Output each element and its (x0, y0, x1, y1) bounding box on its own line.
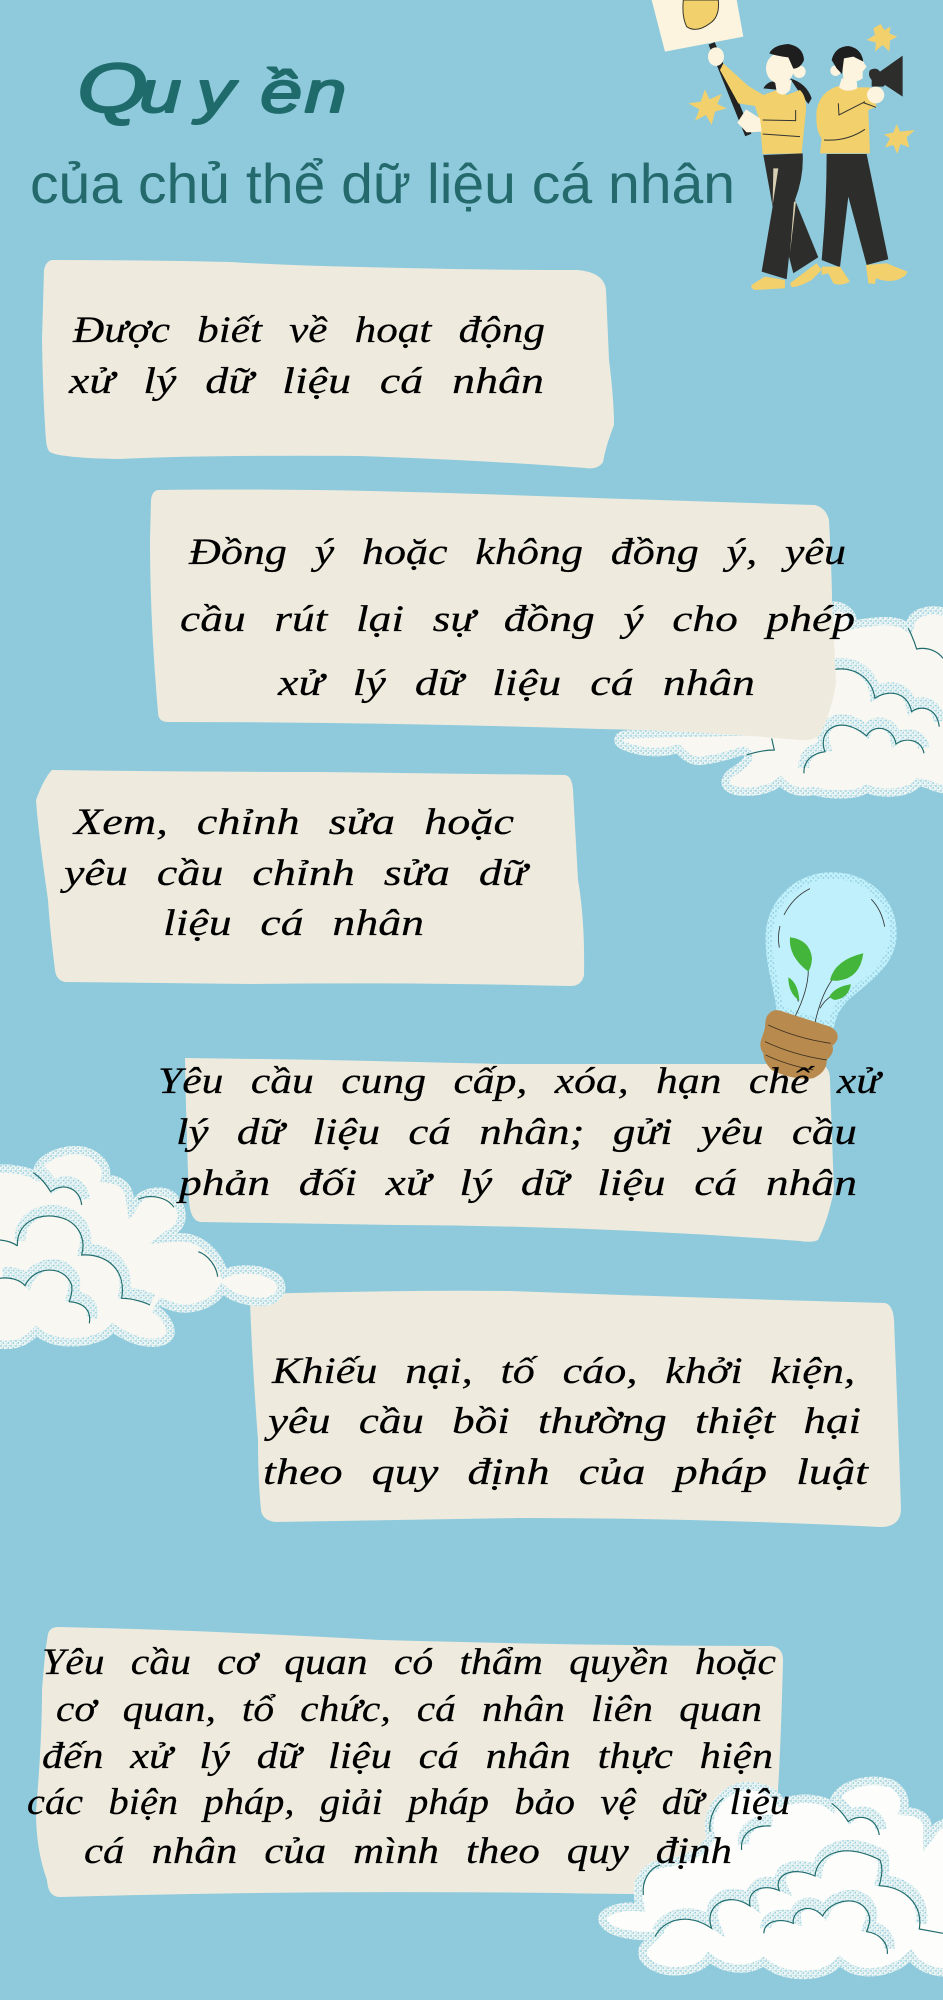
text: panel 5: yêu cầu bồi thường thiệt hại (263, 1401, 861, 1442)
bulb screw base (760, 1010, 838, 1079)
text: panel 2: Đồng ý hoặc không đồng ý, yêu (188, 532, 846, 573)
text: panel 6: đến xử lý dữ liệu cá nhân thực hiện (42, 1736, 773, 1777)
text: panel 1: Được biết về hoạt động (72, 310, 545, 351)
text: panel 6 (27, 1642, 790, 1872)
text: panel 3: liệu cá nhân (163, 903, 424, 944)
text: panel 4 (158, 1061, 883, 1204)
panel 4 (185, 1058, 834, 1242)
panel 6 (36, 1627, 783, 1897)
text: panel 2 (180, 532, 855, 704)
text: panel 3: yêu cầu chỉnh sửa dữ (59, 853, 531, 894)
panel 2 (150, 490, 836, 740)
text: panel 2: cầu rút lại sự đồng ý cho phép (180, 599, 855, 640)
text: panel 4: phản đối xử lý dữ liệu cá nhân (175, 1163, 857, 1204)
figure: man with megaphone (816, 46, 907, 285)
icon: stars (688, 24, 915, 154)
text: panel 4: Yêu cầu cung cấp, xóa, hạn chế xử (158, 1061, 883, 1102)
bulb glass stippled rim (766, 872, 897, 1030)
text: panel 6: Yêu cầu cơ quan có thẩm quyền hoặc (42, 1642, 777, 1683)
icon: megaphone (869, 56, 903, 97)
panel 5 (250, 1291, 901, 1527)
cloud: upper right (614, 601, 943, 799)
panel 1 (42, 260, 614, 468)
text: panel 6: các biện pháp, giải pháp bảo vệ dữ liệu (27, 1782, 790, 1823)
text: panel 6: cá nhân của mình theo quy định (84, 1831, 732, 1872)
text: panel 1 (68, 310, 545, 402)
cloud: bottom right (598, 1777, 943, 1979)
filament lines (778, 889, 885, 1023)
title: Quyền: Quyền (77, 50, 346, 128)
illustration: two people protesting (652, 0, 915, 290)
text: panel 4: lý dữ liệu cá nhân; gửi yêu cầu (176, 1112, 857, 1153)
text: panel 5: theo quy định của pháp luật (263, 1452, 870, 1493)
icon: poster with fist (652, 0, 748, 135)
text: panel 3: Xem, chỉnh sửa hoặc (71, 802, 515, 843)
panel 3 (36, 770, 584, 986)
leaves (788, 937, 863, 1001)
icon: light bulb with plant (760, 872, 897, 1079)
text: panel 5: Khiếu nại, tố cáo, khởi kiện, (271, 1351, 855, 1392)
subtitle: của chủ thể dữ liệu cá nhân (30, 152, 735, 215)
bulb glass (766, 872, 897, 1030)
text: panel 2: xử lý dữ liệu cá nhân (277, 663, 755, 704)
figure: woman (708, 44, 822, 290)
text: panel 1: xử lý dữ liệu cá nhân (68, 361, 544, 402)
text: panel 5 (263, 1351, 870, 1493)
cloud: left (0, 1146, 285, 1349)
text: panel 6: cơ quan, tổ chức, cá nhân liên quan (56, 1689, 762, 1730)
text: panel 3 (59, 802, 531, 944)
